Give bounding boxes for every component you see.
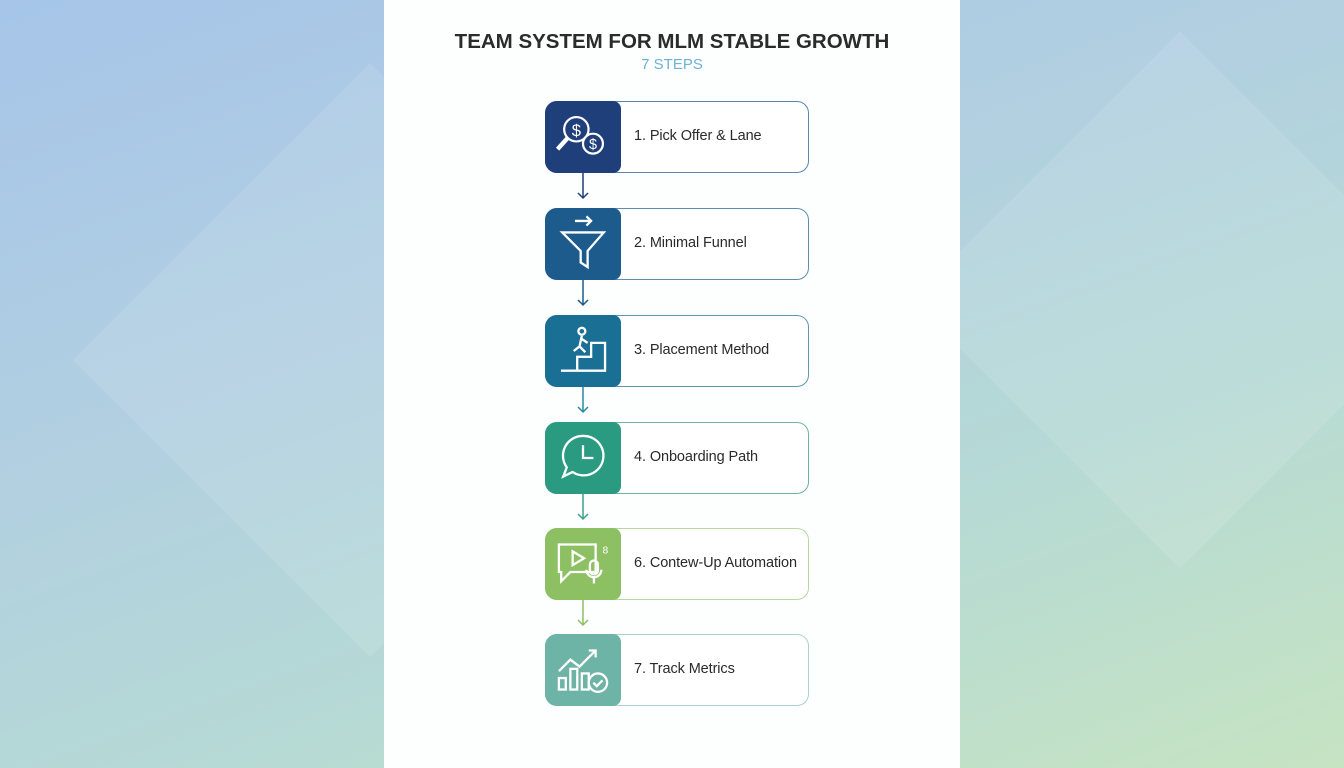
- arrow 3: [578, 387, 588, 413]
- icon: video chat mic: [544, 528, 620, 600]
- step 3 card: 3. Placement Method: [634, 342, 769, 358]
- step 1 card: 1. Pick Offer & Lane: [634, 128, 762, 144]
- step 2 card: 2. Minimal Funnel: [634, 235, 747, 251]
- step 2 card: [545, 208, 809, 280]
- step 6 card: 6. Contew-Up Automation: [634, 555, 797, 571]
- arrow 1: [578, 173, 588, 199]
- icon: magnifier with coins: $: [571, 120, 580, 139]
- icon: stairs climber: [544, 314, 620, 386]
- icon: magnifier with coins: [544, 100, 620, 172]
- step 7 card: [545, 634, 809, 706]
- white panel: [384, 0, 960, 768]
- arrow 4: [578, 494, 588, 520]
- arrow 2: [578, 280, 588, 306]
- icon: video chat mic: 8: [602, 545, 608, 556]
- step 6 card: [545, 528, 809, 600]
- arrow 5: [578, 600, 588, 626]
- icon: chat clock: [544, 422, 620, 494]
- icon: chart with check: [544, 634, 620, 706]
- step 7 card: 7. Track Metrics: [634, 661, 735, 677]
- step 3 card: [545, 315, 809, 387]
- step 4 card: [545, 422, 809, 494]
- icon: funnel: [544, 208, 620, 280]
- step 4 card: 4. Onboarding Path: [634, 449, 758, 465]
- step 1 card: [545, 101, 809, 173]
- title: TEAM SYSTEM FOR MLM STABLE GROWTH: [455, 30, 889, 53]
- icon: magnifier with coins: $: [588, 137, 596, 153]
- subtitle: 7 STEPS: [641, 56, 703, 73]
